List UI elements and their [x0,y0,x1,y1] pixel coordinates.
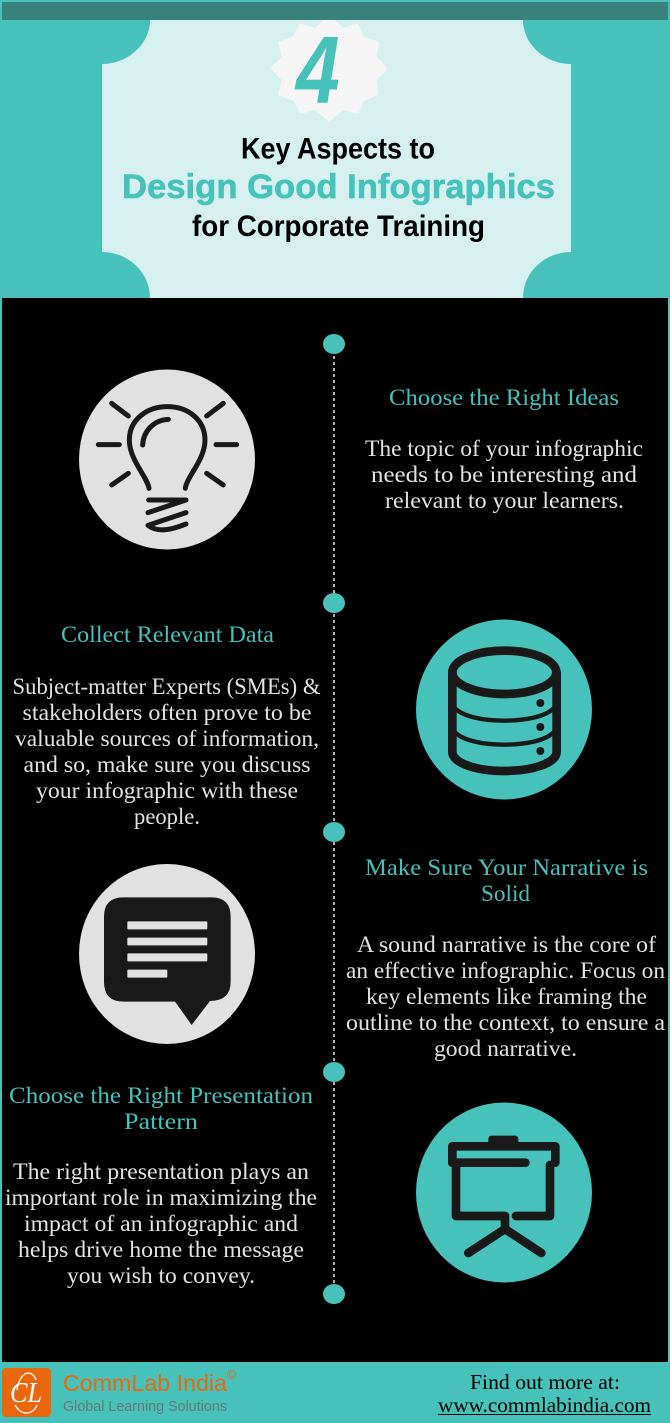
company name: © [227,1368,237,1382]
section: make sure your narrative is solid: good narrative. [434,1036,577,1062]
section: make sure your narrative is solid: Solid [481,881,530,907]
company name: Global Learning Solutions [63,1399,227,1415]
section: collect relevant data [12,622,320,830]
section: collect relevant data: and so, make sure you discuss [24,752,311,778]
section: collect relevant data: people. [134,804,200,830]
icon: speech bubble [79,864,255,1044]
footer [2,1368,651,1417]
website call to action [438,1370,651,1417]
section: collect relevant data: your infographic with these [36,778,298,804]
section: choose the right ideas: Choose the Right Ideas [389,385,619,411]
company name: CommLab India [63,1370,227,1396]
section: choose the right presentation pattern: impact of an infographic and [24,1211,298,1237]
section: collect relevant data: stakeholders often prove to be [22,700,312,726]
header top bar [2,2,668,20]
header [2,2,668,298]
title: Key Aspects to [241,132,435,166]
timeline [323,334,345,1304]
icon: light bulb [79,370,255,550]
section: choose the right presentation pattern: helps drive home the message [18,1237,304,1263]
section: choose the right ideas: The topic of your infographic [365,436,643,462]
section: make sure your narrative is solid: an effective infographic. Focus on [346,958,665,984]
website call to action: Find out more at: [470,1370,620,1394]
section: choose the right presentation pattern: important role in maximizing the [5,1185,317,1211]
badge with number 4: 4 [294,17,340,124]
section: make sure your narrative is solid: Make Sure Your Narrative is [365,855,648,881]
title [122,132,555,243]
section: choose the right ideas [365,385,643,514]
section: collect relevant data: Collect Relevant Data [61,622,275,648]
section: choose the right presentation pattern: Pattern [124,1109,198,1135]
section: make sure your narrative is solid [346,855,666,1062]
section: choose the right presentation pattern: Choose the Right Presentation [9,1083,313,1109]
icon: database [416,620,592,800]
section: choose the right presentation pattern: The right presentation plays an [13,1159,309,1185]
section: choose the right presentation pattern: you wish to convey. [67,1263,255,1289]
website call to action: www.commlabindia.com [438,1393,651,1417]
badge with number 4 [270,15,388,124]
section: choose the right ideas: relevant to your learners. [385,488,624,514]
section: collect relevant data: valuable sources of information, [15,726,319,752]
logo mark [2,1368,51,1417]
section: choose the right ideas: needs to be interesting and [371,462,637,488]
section: choose the right presentation pattern [5,1083,317,1289]
section: make sure your narrative is solid: A sound narrative is the core of [357,932,656,958]
icon: presentation board [416,1102,592,1282]
logo mark: CL [10,1378,42,1409]
section: collect relevant data: Subject-matter Experts (SMEs) & [12,674,320,700]
title panel [102,20,571,298]
title: Design Good Infographics [122,168,555,206]
company name [63,1368,237,1415]
section: make sure your narrative is solid: key elements like framing the [366,984,647,1010]
section: make sure your narrative is solid: outline to the context, to ensure a [346,1010,666,1036]
black content panel [2,298,668,1362]
title: for Corporate Training [192,210,485,243]
